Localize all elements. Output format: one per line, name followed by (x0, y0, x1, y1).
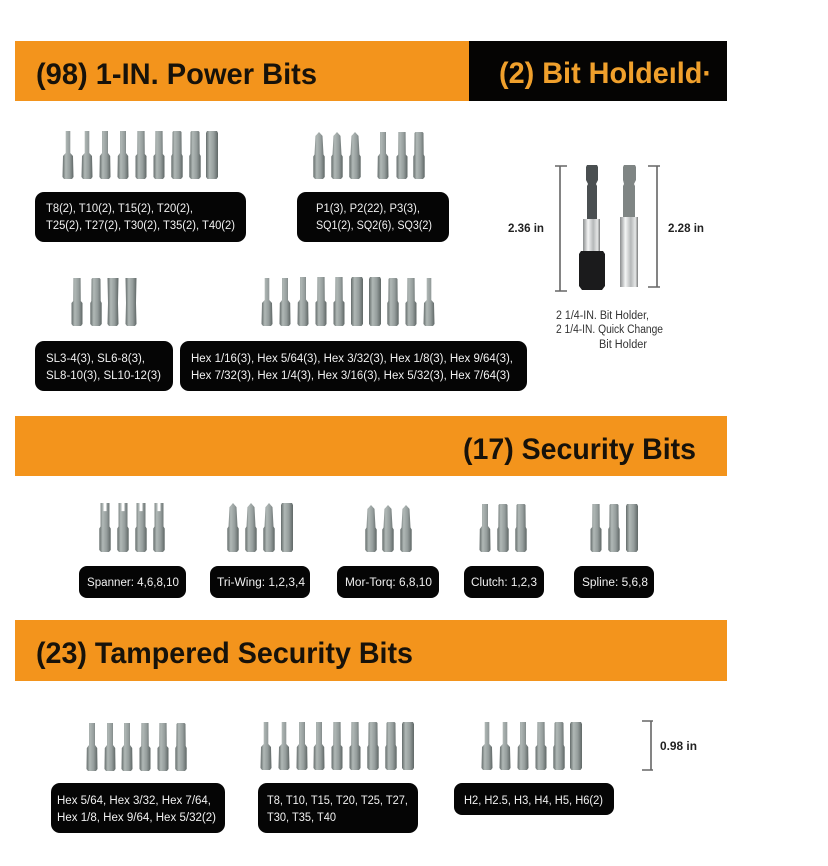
label: mor-torq: Mor-Torq: 6,8,10 (345, 577, 432, 589)
label: hex sizes (180, 341, 527, 391)
label: mor-torq (337, 566, 439, 598)
header band: security bits (15, 416, 727, 476)
caption: bit holders: Bit Holder (599, 339, 647, 351)
bits: spanner (99, 503, 165, 552)
label: phillips and square sizes (297, 192, 449, 242)
label: tri-wing (210, 566, 310, 598)
heading: tampered security bits: (23) Tampered Security Bits (36, 637, 413, 670)
bits: tri-wing (227, 503, 293, 552)
dimension: 0.98 in: 0.98 in (660, 741, 697, 753)
dimension bracket: 2.36 in (555, 166, 567, 291)
dimension bracket: 2.28 in (648, 166, 660, 287)
label: hex sizes: Hex 1/16(3), Hex 5/64(3), Hex 3/32(3), Hex 1/8(3), Hex 9/64(3), (191, 353, 513, 365)
label: clutch (464, 566, 544, 598)
icon: bit holder with black sleeve (579, 165, 605, 290)
bits: torx (62, 131, 218, 179)
caption: bit holders (556, 310, 663, 351)
bits: slotted (72, 278, 136, 326)
label: torx sizes: T25(2), T27(2), T30(2), T35(2), T40(2) (46, 220, 235, 232)
label: torx sizes (35, 192, 246, 242)
label: tamper torx sizes (258, 783, 418, 833)
bits: clutch (480, 504, 527, 552)
label: metric hex sizes: H2, H2.5, H3, H4, H5, H6(2) (464, 795, 603, 807)
label: tri-wing: Tri-Wing: 1,2,3,4 (217, 577, 306, 589)
bits: tamper hex (86, 723, 187, 771)
dimension: 0.98 in (642, 721, 697, 770)
bits: phillips and square (313, 132, 425, 179)
label: spanner (79, 566, 186, 598)
label: phillips and square sizes: P1(3), P2(22), P3(3), (316, 203, 420, 215)
heading: power bits: (98) 1-IN. Power Bits (36, 58, 317, 91)
label: tamper hex sizes (51, 783, 225, 833)
icon: quick change bit holder (620, 165, 638, 287)
label: torx sizes: T8(2), T10(2), T15(2), T20(2), (46, 203, 193, 215)
label: hex sizes: Hex 7/32(3), Hex 1/4(3), Hex 3/16(3), Hex 5/32(3), Hex 7/64(3) (191, 370, 510, 382)
header band: bit holders (469, 41, 727, 101)
header band: tampered security bits (15, 620, 727, 681)
label: clutch: Clutch: 1,2,3 (471, 577, 537, 589)
bits: hex (262, 277, 434, 326)
label: tamper hex sizes: Hex 5/64, Hex 3/32, Hex 7/64, (57, 795, 211, 807)
label: slotted sizes (35, 341, 173, 391)
bits: metric hex (482, 722, 582, 770)
header band: power bits (15, 41, 469, 101)
label: tamper torx sizes: T8, T10, T15, T20, T25, T27, (267, 795, 408, 807)
label: slotted sizes: SL8-10(3), SL10-12(3) (46, 370, 161, 382)
label: phillips and square sizes: SQ1(2), SQ2(6), SQ3(2) (316, 220, 432, 232)
bits: mor-torq (365, 505, 412, 552)
heading: bit holders: (2) Bit Holdeıld· (499, 57, 712, 90)
label: spanner: Spanner: 4,6,8,10 (87, 577, 179, 589)
label: spline: Spline: 5,6,8 (582, 577, 648, 589)
label: tamper torx sizes: T30, T35, T40 (267, 812, 336, 824)
dimension: 2.28 in: 2.28 in (668, 223, 704, 235)
label: tamper hex sizes: Hex 1/8, Hex 9/64, Hex 5/32(2) (57, 812, 216, 824)
label: slotted sizes: SL3-4(3), SL6-8(3), (46, 353, 145, 365)
bits: tamper torx (260, 722, 414, 770)
label: metric hex sizes (454, 783, 614, 815)
caption: bit holders: 2 1/4-IN. Quick Change (556, 324, 663, 336)
heading: security bits: (17) Security Bits (463, 433, 696, 466)
bit holders with dimensions (508, 165, 704, 351)
dimension: 2.36 in: 2.36 in (508, 223, 544, 235)
label: spline (574, 566, 654, 598)
bits: spline (590, 504, 638, 552)
caption: bit holders: 2 1/4-IN. Bit Holder, (556, 310, 649, 322)
